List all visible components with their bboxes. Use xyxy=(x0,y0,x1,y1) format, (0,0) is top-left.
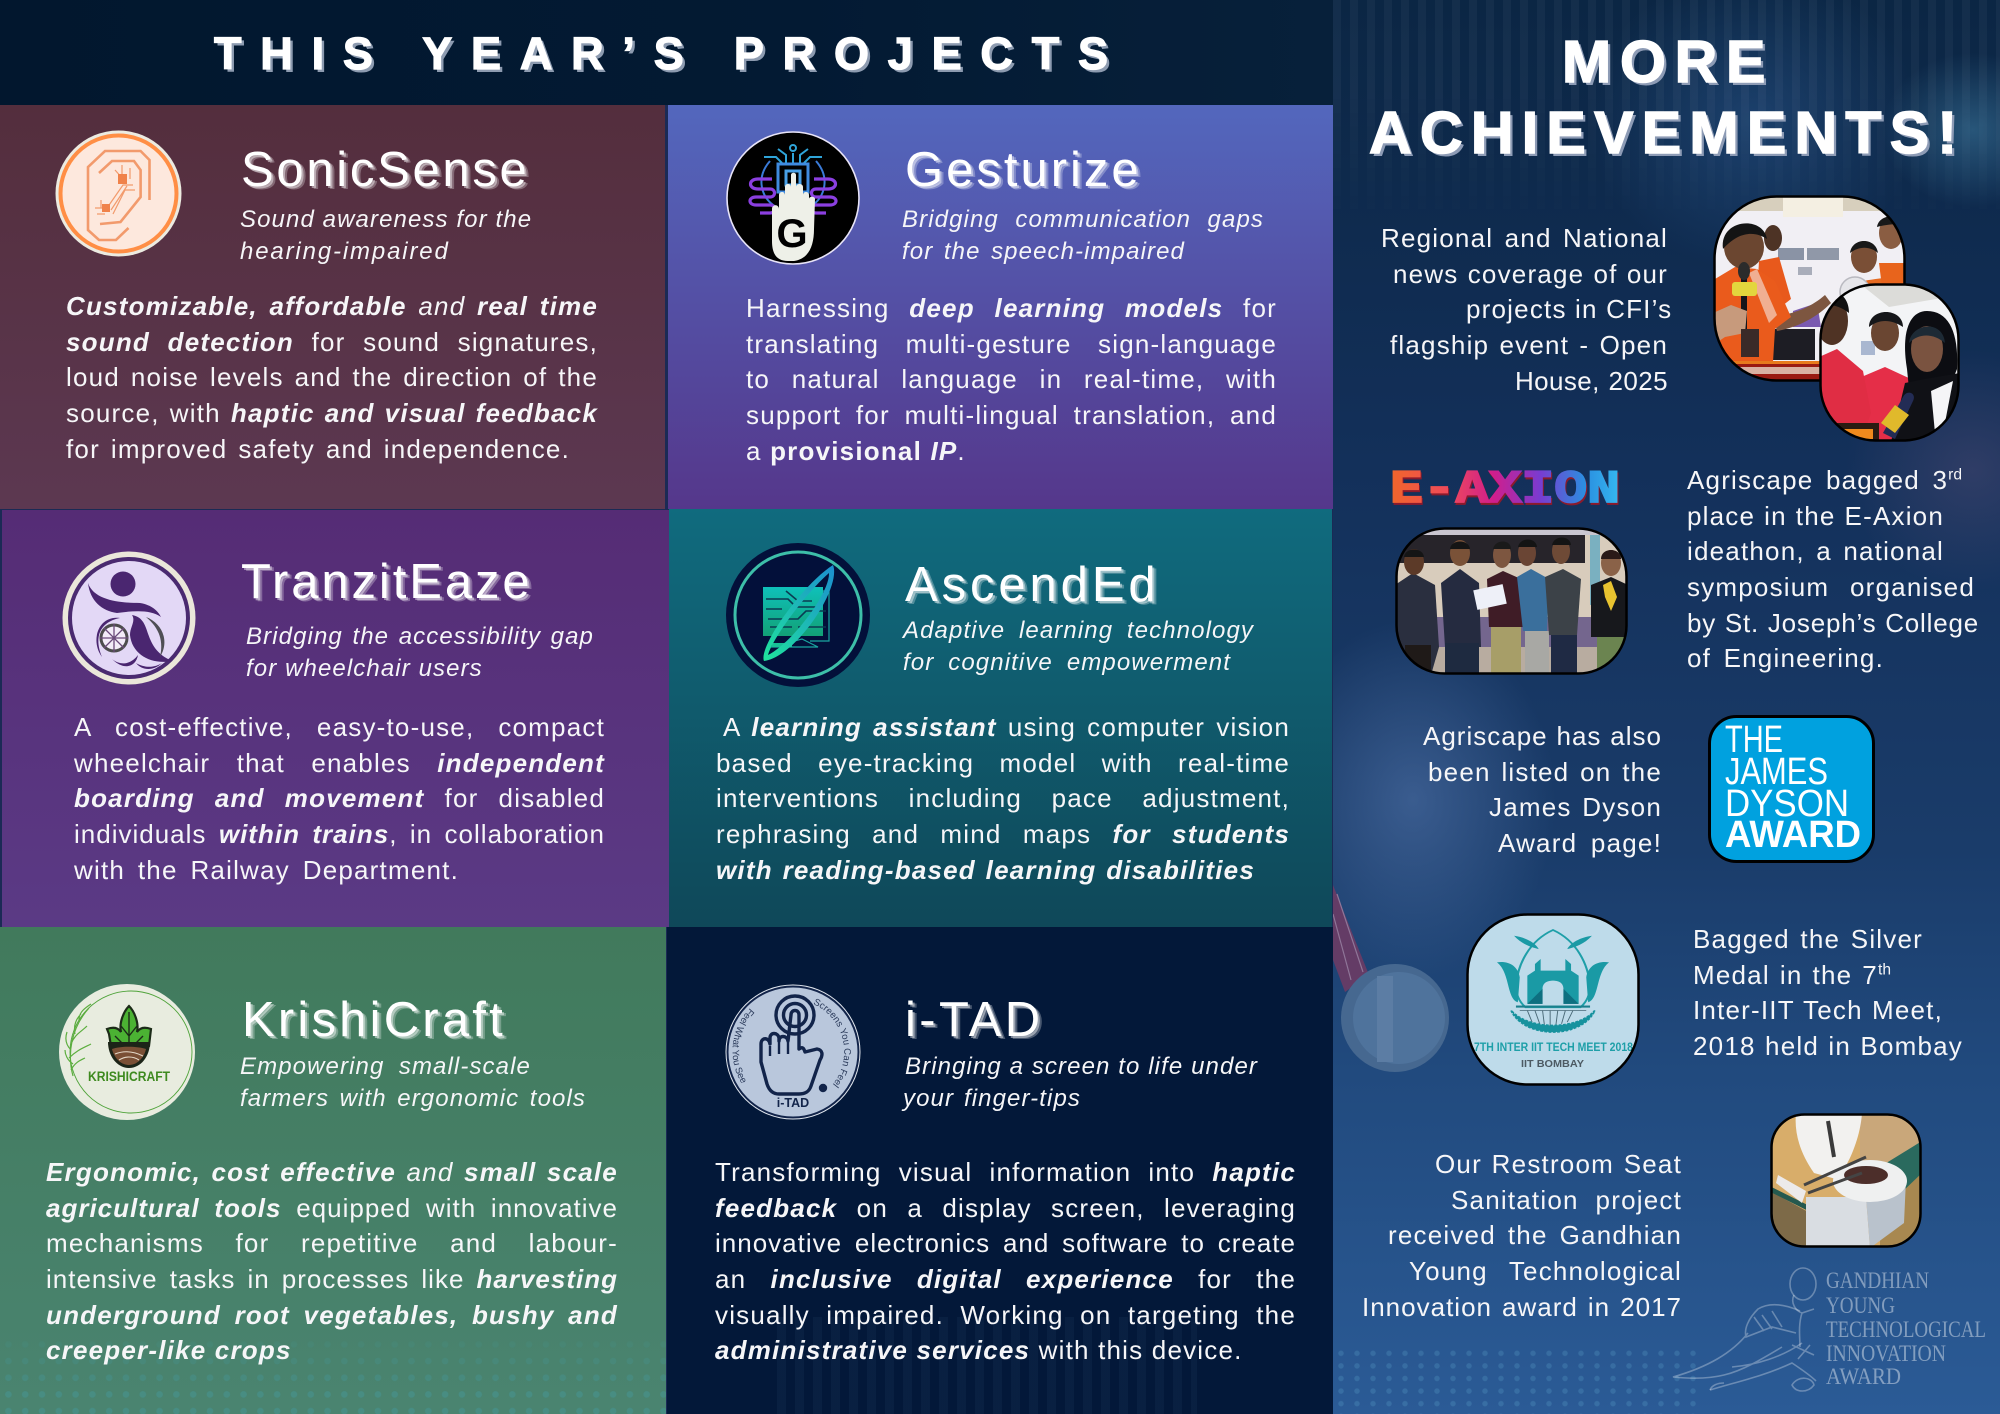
description: an inclusive digital experience for the xyxy=(715,1264,1296,1294)
photo: news interview one xyxy=(1713,195,1906,382)
description: Ergonomic, cost effective and small scale xyxy=(46,1157,618,1187)
logo: Gandhian award watermark: AWARD xyxy=(1826,1364,1901,1389)
icon: i-TAD touch logo: Screens You Can Feel xyxy=(814,998,851,1088)
description: A learning assistant using computer vision xyxy=(723,712,1290,742)
text: news coverage xyxy=(1381,223,1672,396)
text: E-Axion placement: symposium organised xyxy=(1687,572,1975,602)
panel: AscendEd xyxy=(669,509,1332,927)
tagline: Bridging the accessibility gap xyxy=(246,623,594,650)
photo: restroom seat xyxy=(1770,1113,1922,1248)
tagline xyxy=(902,1053,1258,1112)
description: underground root vegetables, bushy and xyxy=(46,1300,618,1330)
description xyxy=(66,291,598,464)
description: administrative services with this device. xyxy=(715,1335,1243,1365)
description: innovative electronics and software to create xyxy=(715,1228,1296,1258)
description: Transforming visual information into haptic xyxy=(715,1157,1296,1187)
tagline: Adaptive learning technology xyxy=(903,617,1254,644)
photo: E-Axion award ceremony xyxy=(1395,527,1628,675)
icon: KrishiCraft logo xyxy=(59,984,195,1120)
description: individuals within trains, in collaboration xyxy=(74,819,605,849)
description: with reading-based learning disabilities xyxy=(716,855,1255,885)
description xyxy=(74,712,605,885)
text: E-Axion placement xyxy=(1687,465,1979,673)
description: sound detection for sound signatures, xyxy=(66,327,598,357)
logo: James Dyson Award: AWARD xyxy=(1725,814,1861,856)
panel: i-TAD xyxy=(667,927,1333,1414)
stripe pattern xyxy=(1333,0,2000,99)
heading: more achievements xyxy=(1369,29,1965,166)
text: news coverage: news coverage of our xyxy=(1393,259,1668,289)
dot pattern xyxy=(1333,1347,1702,1414)
tagline xyxy=(902,617,1254,676)
logo: James Dyson Award: THE xyxy=(1725,719,1783,761)
tagline: Sound awareness for the xyxy=(240,206,532,233)
tagline: Bringing a screen to life under xyxy=(905,1053,1258,1080)
tagline xyxy=(902,206,1264,265)
logo: Inter-IIT Tech Meet xyxy=(1466,913,1640,1086)
logo: Gandhian award watermark: GANDHIAN xyxy=(1826,1268,1929,1293)
icon: SonicSense ear logo xyxy=(56,130,182,256)
text: James Dyson listing: Award page! xyxy=(1498,828,1662,858)
tagline: hearing-impaired xyxy=(240,238,450,265)
description: boarding and movement for disabled xyxy=(74,783,605,813)
panel: KrishiCraft xyxy=(0,927,666,1414)
text: James Dyson listing: Agriscape has also xyxy=(1423,721,1662,751)
tagline xyxy=(240,206,532,265)
description: to natural language in real-time, with xyxy=(746,364,1277,394)
description: Customizable, affordable and real time xyxy=(66,291,598,321)
logo: Gandhian award watermark: YOUNG xyxy=(1826,1293,1895,1318)
description: source, with haptic and visual feedback xyxy=(66,398,598,428)
tagline: farmers with ergonomic tools xyxy=(240,1085,586,1112)
tagline xyxy=(246,623,594,682)
description: support for multi-lingual translation, and xyxy=(746,400,1277,430)
description xyxy=(715,1157,1296,1365)
panel: TranzitEaze xyxy=(2,510,669,927)
text: Inter-IIT silver medal xyxy=(1693,924,1963,1061)
logo: Inter-IIT Tech Meet: 7TH INTER IIT TECH MEET 2018 xyxy=(1474,1042,1634,1054)
text: Gandhian award xyxy=(1362,1149,1682,1322)
text: Gandhian award: Innovation award in 2017 xyxy=(1362,1292,1682,1322)
description: a provisional IP. xyxy=(746,436,966,466)
tagline: for wheelchair users xyxy=(246,655,483,682)
icon: TranzitEaze wheelchair logo xyxy=(62,552,196,684)
tagline xyxy=(240,1053,586,1112)
dot pattern xyxy=(5,1358,666,1414)
description xyxy=(716,712,1290,885)
heading: KrishiCraft: KrishiCraft xyxy=(242,993,506,1047)
description: wheelchair that enables independent xyxy=(74,748,605,778)
tagline: for cognitive empowerment xyxy=(903,649,1231,676)
text: Gandhian award: Our Restroom Seat xyxy=(1435,1149,1682,1179)
description: feedback on a display screen, leveraging xyxy=(715,1193,1296,1223)
logo: James Dyson Award: DYSON xyxy=(1725,783,1849,825)
text: James Dyson listing: James Dyson xyxy=(1489,792,1662,822)
logo: E-Axion: E-AXION xyxy=(1390,464,1620,516)
description: rephrasing and mind maps for students xyxy=(716,819,1290,849)
panel: Gesturize xyxy=(668,105,1333,509)
icon: AscendEd monitor logo xyxy=(726,543,870,687)
tagline: Empowering small-scale xyxy=(240,1053,531,1080)
text: E-Axion placement: place in the E-Axion xyxy=(1687,501,1944,531)
description xyxy=(746,293,1277,466)
tagline: your finger-tips xyxy=(903,1085,1081,1112)
description: Harnessing deep learning models for xyxy=(746,293,1277,323)
heading: i-TAD: i-TAD xyxy=(905,993,1044,1047)
panel: more achievements xyxy=(1333,0,2000,1414)
text: Inter-IIT silver medal: Bagged the Silver xyxy=(1693,924,1923,954)
description: with the Railway Department. xyxy=(74,855,459,885)
icon: medal watermark xyxy=(1333,885,1449,1072)
icon: i-TAD touch logo: i-TAD xyxy=(777,1096,809,1110)
text: news coverage: projects in CFI’s xyxy=(1466,294,1672,324)
icon: i-TAD touch logo xyxy=(726,984,860,1120)
photo: news interview two xyxy=(1819,283,1960,442)
text: Gandhian award: Young Technological xyxy=(1409,1256,1682,1286)
header band xyxy=(0,0,1333,105)
stripe pattern xyxy=(777,1317,1197,1414)
text: James Dyson listing: been listed on the xyxy=(1428,757,1662,787)
text: E-Axion placement: ideathon, a national xyxy=(1687,536,1944,566)
logo: Gandhian award watermark xyxy=(1672,1267,1986,1392)
logo: James Dyson Award: JAMES xyxy=(1725,751,1828,793)
description: loud noise levels and the direction of the xyxy=(66,362,598,392)
logo: Inter-IIT Tech Meet: IIT BOMBAY xyxy=(1521,1058,1584,1070)
description: mechanisms for repetitive and labour- xyxy=(46,1228,618,1258)
description: A cost-effective, easy-to-use, compact xyxy=(74,712,605,742)
description: creeper-like crops xyxy=(46,1335,292,1365)
description: agricultural tools equipped with innovative xyxy=(46,1193,618,1223)
description: translating multi-gesture sign-language xyxy=(746,329,1277,359)
title: this year's projects: THIS YEAR’S PROJECTS xyxy=(214,28,1127,79)
text: James Dyson listing xyxy=(1423,721,1662,858)
description: visually impaired. Working on targeting the xyxy=(715,1300,1296,1330)
description: intensive tasks in processes like harvesting xyxy=(46,1264,618,1294)
text: news coverage: House, 2025 xyxy=(1515,366,1668,396)
panel: SonicSense xyxy=(0,105,665,509)
text: Inter-IIT silver medal: Medal in the 7th xyxy=(1693,960,1891,990)
text: Inter-IIT silver medal: Inter-IIT Tech Meet, xyxy=(1693,995,1943,1025)
heading: Gesturize: Gesturize xyxy=(905,143,1142,197)
logo: James Dyson Award xyxy=(1708,715,1875,863)
heading: AscendEd: AscendEd xyxy=(905,558,1160,612)
heading: more achievements: ACHIEVEMENTS! xyxy=(1369,100,1965,166)
text: news coverage: flagship event - Open xyxy=(1390,330,1668,360)
text: E-Axion placement: Agriscape bagged 3rd xyxy=(1687,465,1962,495)
description xyxy=(46,1157,618,1365)
icon: KrishiCraft logo: KRISHICRAFT xyxy=(88,1069,171,1084)
icon: i-TAD touch logo: Feel What You See xyxy=(732,1008,754,1083)
text: E-Axion placement: by St. Joseph’s College xyxy=(1687,608,1979,638)
text: E-Axion placement: of Engineering. xyxy=(1687,643,1884,673)
heading: TranzitEaze: TranzitEaze xyxy=(241,555,533,609)
heading: more achievements: MORE xyxy=(1562,29,1774,95)
description: interventions including pace adjustment, xyxy=(716,783,1290,813)
icon: Gesturize hand logo xyxy=(726,131,860,265)
description: for improved safety and independence. xyxy=(66,434,570,464)
logo: Gandhian award watermark: INNOVATION xyxy=(1826,1341,1946,1366)
heading: SonicSense: SonicSense xyxy=(241,143,530,197)
text: Gandhian award: Sanitation project xyxy=(1451,1185,1682,1215)
text: Gandhian award: received the Gandhian xyxy=(1388,1220,1682,1250)
text: news coverage: Regional and National xyxy=(1381,223,1668,253)
icon: Gesturize hand logo: G xyxy=(776,212,808,256)
description: based eye-tracking model with real-time xyxy=(716,748,1290,778)
text: Inter-IIT silver medal: 2018 held in Bombay xyxy=(1693,1031,1963,1061)
tagline: Bridging communication gaps xyxy=(902,206,1264,233)
tagline: for the speech-impaired xyxy=(902,238,1185,265)
